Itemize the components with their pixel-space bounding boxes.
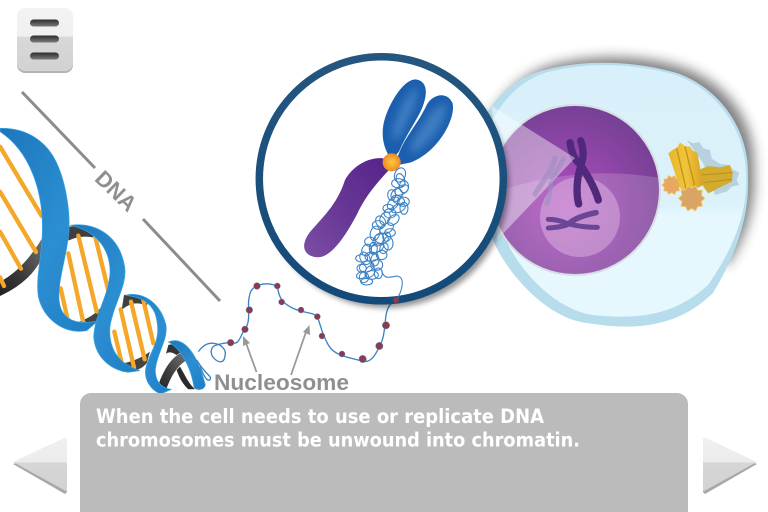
caption text: chromosomes must be unwound into chromatin. xyxy=(96,428,580,452)
next arrow xyxy=(703,438,757,494)
lens overlap nucleosome xyxy=(393,297,399,303)
cell xyxy=(471,57,754,327)
DNA label with leader lines xyxy=(22,92,220,301)
chromatin thread with nucleosomes xyxy=(197,270,403,380)
cell nucleus xyxy=(498,104,661,276)
menu button xyxy=(17,8,73,73)
previous arrow xyxy=(13,438,67,494)
nucleosome label with arrows xyxy=(214,325,349,395)
chromosome xyxy=(304,79,453,257)
nucleus chromosomes xyxy=(548,141,598,228)
text panel xyxy=(80,393,688,512)
DNA label with leader lines: DNA xyxy=(90,165,142,217)
caption text: When the cell needs to use or replicate DNA xyxy=(96,405,544,428)
centrioles xyxy=(662,140,739,211)
magnifier cone xyxy=(492,106,575,240)
chromatin tangle xyxy=(356,166,410,300)
DNA double helix xyxy=(0,128,205,394)
nucleosome label with arrows: Nucleosome xyxy=(214,370,349,395)
faded chromosome in cone xyxy=(535,158,563,204)
magnified chromosome lens xyxy=(259,57,509,308)
